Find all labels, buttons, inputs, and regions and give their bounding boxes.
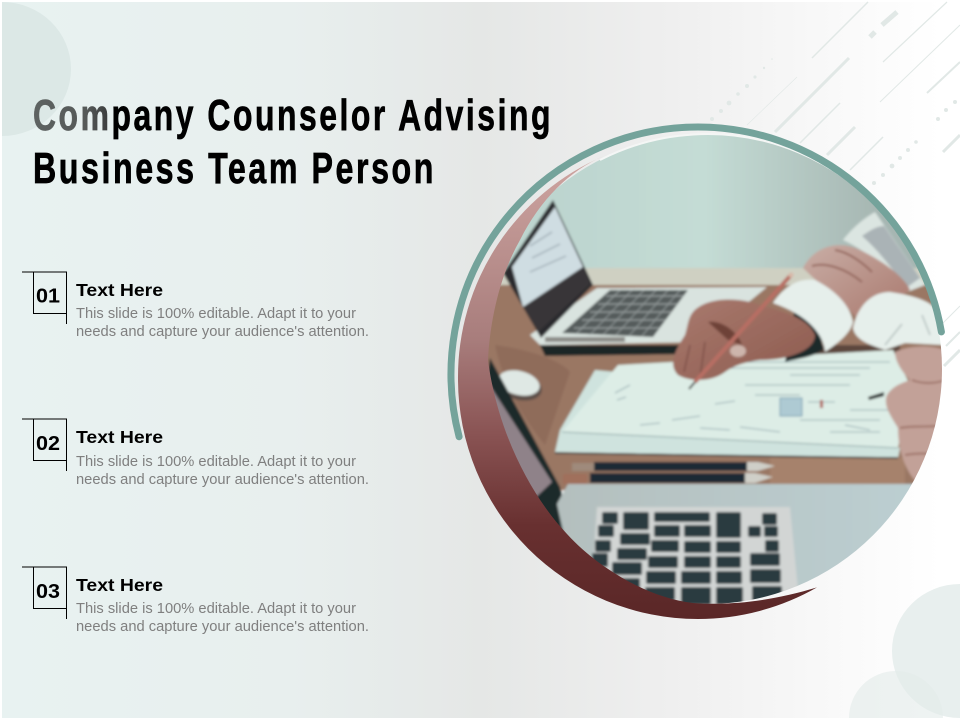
item 01 text: needs and capture your audience's attention.	[76, 324, 369, 340]
title	[33, 91, 553, 193]
item 02 text	[76, 427, 369, 488]
number badge 02: 02	[36, 433, 60, 455]
number badge 03	[22, 567, 66, 619]
title: Business Team Person	[33, 144, 436, 193]
title: Company Counselor Advising	[33, 91, 553, 140]
wall	[507, 135, 918, 270]
item 03 text: This slide is 100% editable. Adapt it to your	[76, 601, 356, 617]
papers	[555, 350, 910, 458]
maroon crescent	[458, 156, 817, 619]
item 03 text: Text Here	[76, 575, 163, 595]
decorative circle top left	[2, 2, 71, 136]
writing hand	[673, 300, 815, 380]
teal arc	[451, 127, 941, 437]
number badge 01: 01	[36, 286, 60, 308]
upper right hand	[803, 245, 910, 318]
item 01 text: Text Here	[76, 280, 163, 300]
item 02 text: Text Here	[76, 427, 163, 447]
lower laptop	[488, 358, 913, 604]
right cuff	[853, 292, 944, 350]
upper laptop	[503, 200, 767, 356]
item 02 text: needs and capture your audience's attention.	[76, 472, 369, 488]
number badge 01	[22, 272, 66, 324]
item 01 text	[76, 280, 369, 340]
decorative circles bottom right	[849, 584, 960, 718]
item 03 text	[76, 575, 369, 635]
list item 03	[22, 567, 369, 635]
pens	[563, 462, 775, 484]
item 02 text: This slide is 100% editable. Adapt it to your	[76, 454, 356, 470]
circular photo: desk scene	[488, 135, 942, 604]
item 03 text: needs and capture your audience's attention.	[76, 619, 369, 635]
right hand and pencil	[868, 346, 945, 490]
wooden table	[460, 285, 950, 490]
decorative corner: diagonal lines and dots	[710, 2, 960, 366]
number badge 03: 03	[36, 581, 60, 603]
background strip	[501, 267, 924, 286]
photo rim highlight	[600, 134, 932, 300]
mouse	[498, 368, 542, 402]
list item 01	[22, 272, 369, 340]
number badge 02	[22, 419, 66, 471]
pencil	[689, 272, 794, 389]
upper right sleeve	[843, 212, 925, 292]
left cuff	[773, 280, 853, 362]
item 01 text: This slide is 100% editable. Adapt it to your	[76, 306, 356, 322]
list item 02	[22, 419, 369, 488]
